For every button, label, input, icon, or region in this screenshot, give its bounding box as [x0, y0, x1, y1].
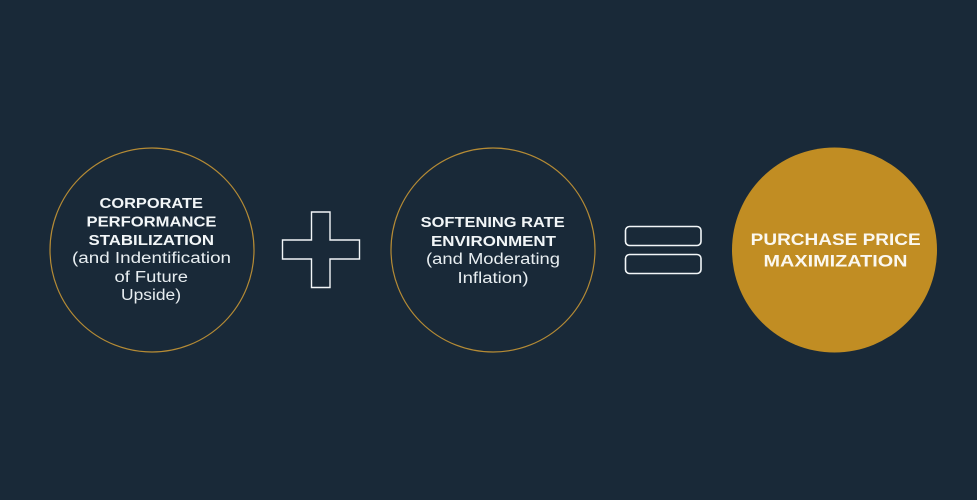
panel: corporate performance circle: [50, 148, 254, 352]
outline circle 1: [50, 148, 254, 352]
text: corporate performance stabilization: [72, 196, 231, 304]
text: corporate performance stabilization: PERFORMANCE: [86, 214, 217, 230]
panel: purchase price maximization circle: [732, 148, 937, 352]
text: softening rate environment: SOFTENING RATE: [421, 215, 565, 231]
text: softening rate environment: ENVIRONMENT: [431, 234, 556, 250]
text: corporate performance stabilization: of Future: [114, 269, 188, 286]
text: softening rate environment: Inflation): [458, 270, 528, 287]
text: corporate performance stabilization: CORPORATE: [100, 196, 203, 212]
icon: equals sign: [626, 226, 701, 274]
text: corporate performance stabilization: (and Indentification: [72, 250, 231, 267]
text: purchase price maximization: MAXIMIZATION: [764, 252, 908, 270]
panel: softening rate circle: [391, 148, 595, 352]
outline circle 2: [391, 148, 595, 352]
text: corporate performance stabilization: STABILIZATION: [88, 233, 214, 249]
text: purchase price maximization: [751, 230, 921, 270]
text: softening rate environment: [421, 215, 565, 287]
filled gold circle: [732, 148, 937, 352]
text: softening rate environment: (and Moderating: [426, 251, 560, 268]
text: corporate performance stabilization: Upside): [121, 287, 181, 304]
text: purchase price maximization: PURCHASE PRICE: [751, 230, 921, 249]
icon: plus sign: [282, 212, 360, 288]
